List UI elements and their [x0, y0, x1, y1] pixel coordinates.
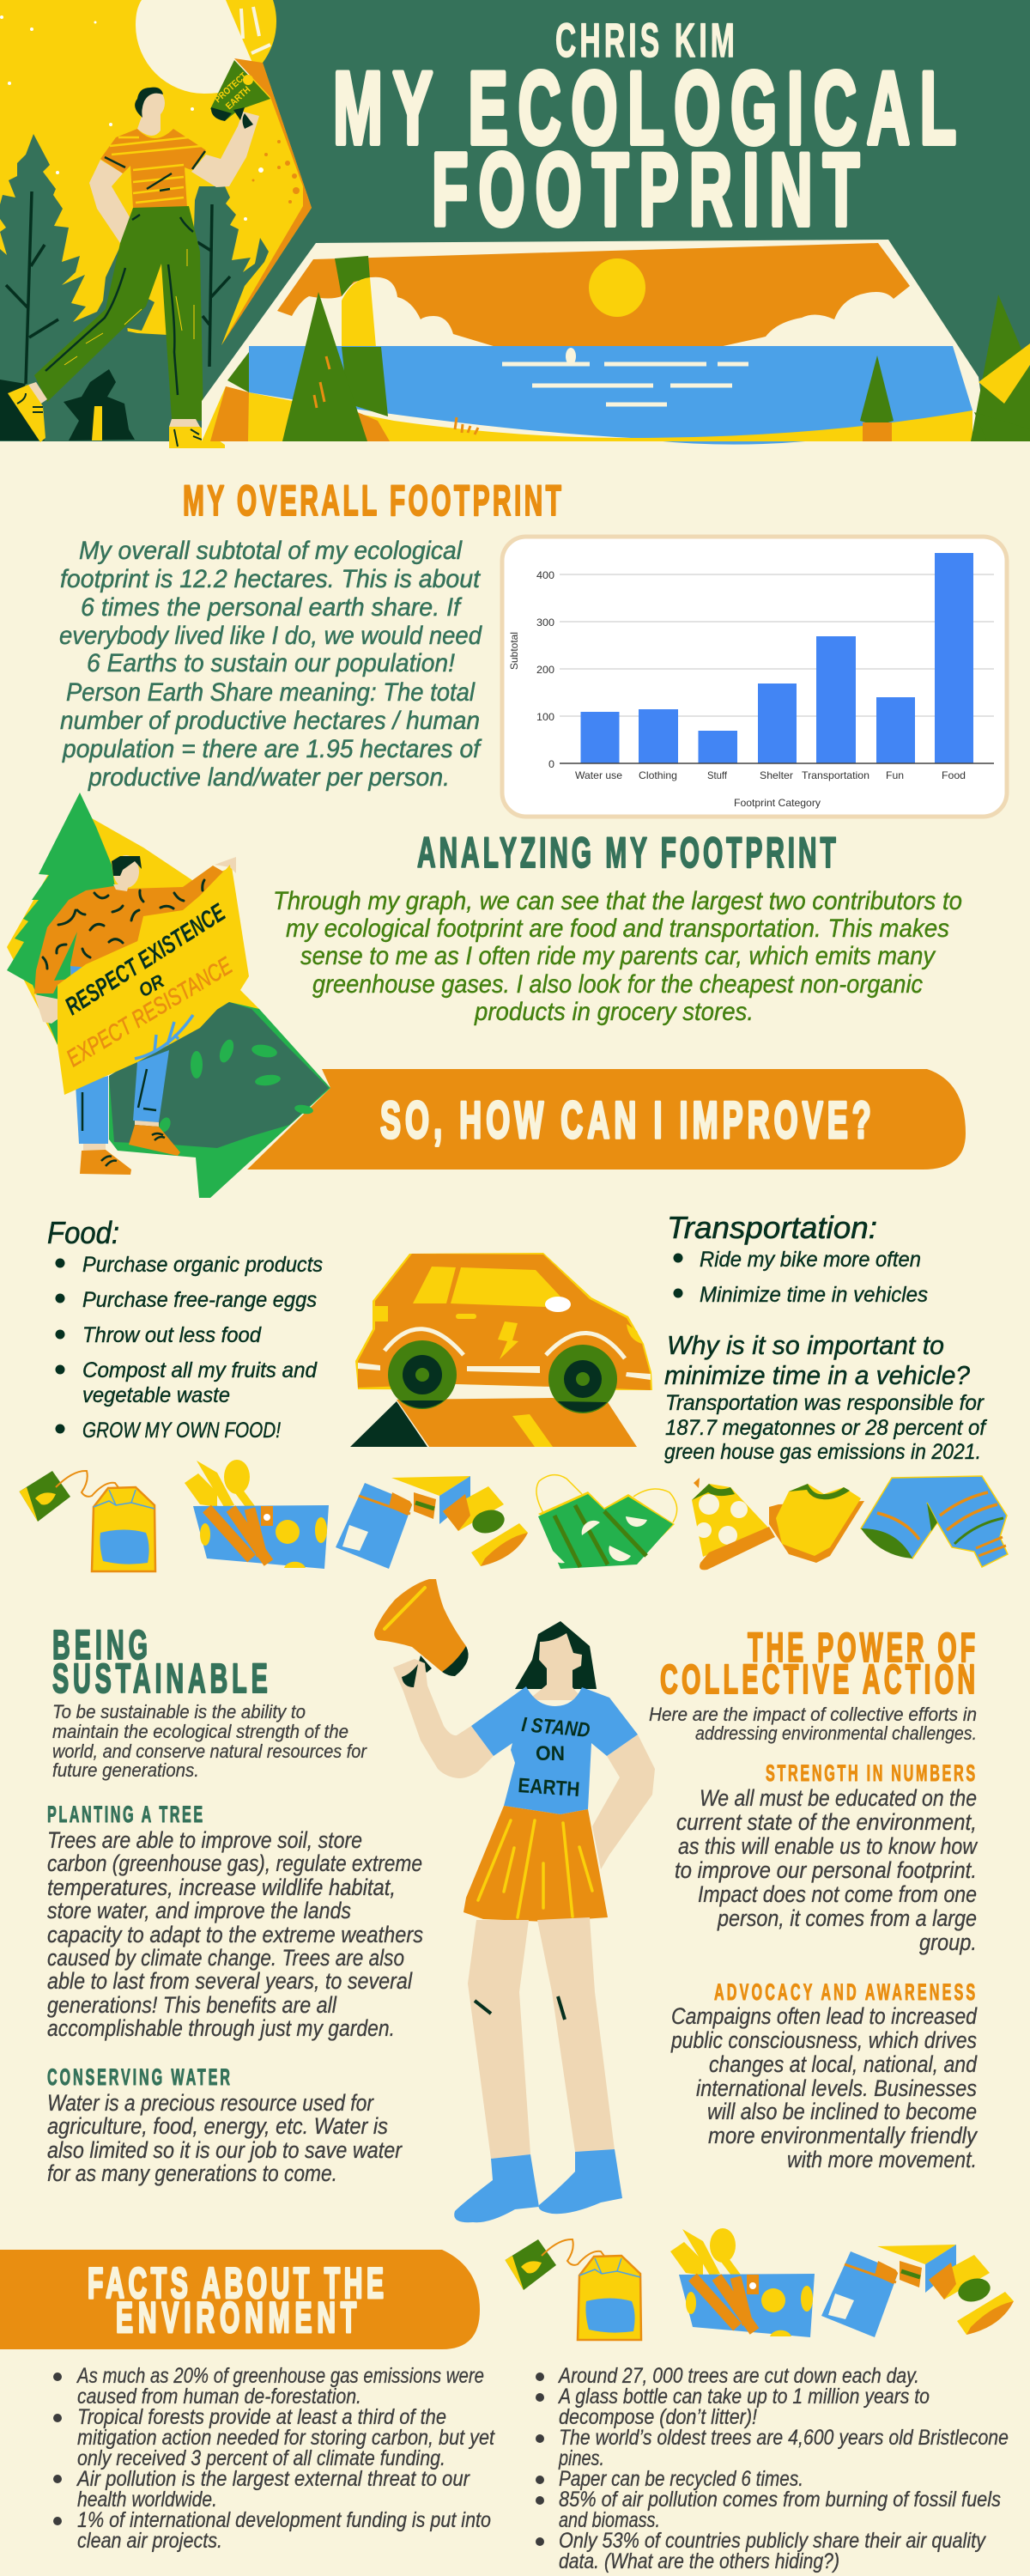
food list: GROW MY OWN FOOD!	[82, 1419, 281, 1443]
shirt text: ON	[536, 1742, 565, 1765]
transportation statistic: Transportation was responsible for	[665, 1391, 985, 1415]
illustration: man with megaphone	[8, 60, 270, 448]
icon: blue shorts	[861, 1476, 1008, 1567]
banner: facts about the environment: FACTS ABOUT THE	[88, 2259, 384, 2307]
text block: planting a tree: generations! This benefits are all	[47, 1992, 337, 2018]
list: environment facts left: 1% of international development funding is put into	[77, 2508, 491, 2532]
x axis labels: Transportation	[802, 769, 869, 781]
shoes	[80, 1150, 131, 1175]
x axis labels: Water use	[575, 769, 622, 781]
icon: tea bag	[19, 1471, 155, 1571]
text block: overall footprint: 6 times the personal earth share. If	[81, 593, 463, 622]
icon row: eco products repeated	[505, 2228, 1014, 2340]
text block: advocacy and awareness	[670, 1979, 978, 2172]
lake landscape scene	[202, 240, 1030, 445]
shirt text: I STAND	[520, 1713, 591, 1742]
text block: advocacy and awareness: will also be inclined to become	[707, 2099, 977, 2124]
banner: so, how can I improve	[247, 1069, 966, 1170]
text block: conserving water: for as many generations to come.	[47, 2160, 337, 2186]
text block: planting a tree: caused by climate change. Trees are also	[47, 1945, 404, 1971]
illustration: person with banner: OR	[135, 970, 168, 1001]
left pine tree	[0, 134, 129, 343]
list: environment facts right: Paper can be recycled 6 times.	[559, 2467, 803, 2491]
heading: the power of collective action	[660, 1625, 975, 1703]
header banner	[0, 0, 1030, 441]
main title line two: FOOTPRINT	[432, 131, 859, 247]
x axis labels: Stuff	[707, 769, 728, 781]
heading: my overall footprint: MY OVERALL FOOTPRINT	[183, 477, 561, 525]
text block: overall footprint: number of productive hectares / human	[60, 707, 480, 735]
text block: sustainability definition: maintain the ecological strength of the	[52, 1721, 348, 1742]
main title line one: MY ECOLOGICAL	[333, 50, 956, 166]
orange beam edge	[221, 58, 312, 345]
right pine tree	[193, 186, 269, 352]
megaphone	[374, 1579, 469, 1676]
heading: analyzing my footprint: ANALYZING MY FOOTPRINT	[417, 829, 836, 877]
text block: planting a tree: store water, and improve the lands	[47, 1898, 351, 1923]
raised arm and hand	[393, 1659, 494, 1778]
bars	[580, 553, 973, 763]
subheading: CONSERVING WATER	[47, 2064, 230, 2090]
text block: conserving water	[47, 2064, 403, 2186]
windows	[413, 1267, 456, 1303]
text block: collective intro: addressing environmental challenges.	[695, 1722, 977, 1744]
banner: so, how can I improve: SO, HOW CAN I IMPROVE?	[380, 1092, 871, 1149]
list: environment facts left: clean air projects.	[77, 2529, 222, 2553]
list: environment facts right: and biomass.	[559, 2508, 660, 2532]
y axis labels: 100	[536, 711, 554, 723]
text block: advocacy and awareness: international levels. Businesses	[696, 2075, 977, 2101]
text block: analyzing	[273, 887, 962, 1026]
hands	[34, 994, 64, 1024]
x axis labels	[575, 769, 966, 809]
why subheading	[664, 1330, 971, 1390]
why subheading: Why is it so important to	[667, 1330, 944, 1360]
banner: facts about the environment: ENVIRONMENT	[116, 2293, 356, 2342]
text block: conserving water: also limited so it is our job to save water	[47, 2137, 403, 2163]
dark tree silhouettes	[64, 369, 135, 440]
text block: analyzing: greenhouse gases. I also look for the cheapest non-organic	[312, 970, 923, 999]
list: environment facts right: decompose (don’t litter)!	[559, 2405, 757, 2429]
yellow backdrop	[7, 818, 259, 1082]
icon row: eco products	[19, 1460, 528, 1571]
food list: Throw out less food	[82, 1323, 262, 1347]
text block: planting a tree: temperatures, increase wildlife habitat,	[47, 1874, 396, 1900]
text block: advocacy and awareness: with more movement.	[787, 2147, 977, 2172]
transportation statistic: 187.7 megatonnes or 28 percent of	[665, 1416, 988, 1440]
text block: strength in numbers: to improve our personal footprint.	[675, 1857, 977, 1883]
text block: analyzing: my ecological footprint are food and transportation. This makes	[286, 914, 949, 943]
food list: Purchase free-range eggs	[82, 1288, 317, 1312]
text block: planting a tree	[47, 1801, 423, 2041]
list: environment facts left: Tropical forests provide at least a third of the	[77, 2405, 446, 2429]
list: environment facts right: A glass bottle can take up to 1 million years to	[557, 2385, 930, 2409]
panel: food	[47, 1215, 323, 1443]
author name: CHRIS KIM	[555, 13, 735, 67]
subheading: PLANTING A TREE	[47, 1801, 203, 1827]
striped shirt	[100, 129, 206, 208]
text block: planting a tree: capacity to adapt to the extreme weathers	[47, 1922, 423, 1947]
illustration: man with megaphone: PROTECT	[213, 70, 249, 105]
icon: green shopping bags	[536, 1475, 677, 1569]
food list: Purchase organic products	[82, 1253, 323, 1277]
list: environment facts left: mitigation action needed for storing carbon, but yet	[77, 2426, 495, 2450]
text block: planting a tree: Trees are able to improve soil, store	[47, 1827, 362, 1853]
shirt text: EARTH	[518, 1774, 580, 1801]
toast	[769, 1501, 864, 1563]
heading: the power of collective action: COLLECTIVE ACTION	[660, 1657, 975, 1703]
icon: cutlery cup	[185, 1460, 329, 1569]
illustration: woman with megaphone	[374, 1579, 655, 2222]
shirt text	[518, 1713, 591, 1801]
road	[397, 1398, 637, 1447]
list: environment facts left: caused from human de-forestation.	[77, 2385, 361, 2409]
list: environment facts left: only received 3 percent of all climate funding.	[77, 2446, 445, 2470]
text block: sustainability definition: future generations.	[52, 1759, 199, 1781]
x axis labels: Food	[942, 769, 966, 781]
text block: planting a tree: able to last from several years, to several	[47, 1968, 413, 1994]
face and neck	[528, 1633, 584, 1700]
list: environment facts right: data. (What are the others hiding?)	[559, 2549, 839, 2573]
ankle and shoes	[28, 382, 47, 405]
text block: strength in numbers: Impact does not come from one	[698, 1881, 977, 1907]
text block: strength in numbers: person, it comes from a large	[717, 1905, 977, 1931]
wheels	[388, 1340, 617, 1413]
food list: Compost all my fruits and	[82, 1358, 318, 1382]
text block: collective intro	[649, 1704, 977, 1744]
heading: the power of collective action: THE POWER OF	[748, 1625, 975, 1671]
green pine	[7, 793, 116, 1045]
text block: advocacy and awareness: public consciousness, which drives	[670, 2027, 977, 2053]
neck and head	[137, 112, 161, 136]
list: environment facts right: pines.	[558, 2446, 604, 2470]
far arm	[592, 1735, 655, 1869]
text block: sustainability definition	[52, 1701, 368, 1781]
x axis labels: Footprint Category	[734, 797, 821, 809]
panel: transportation	[664, 1210, 988, 1464]
shirt	[471, 1686, 638, 1814]
car body	[355, 1253, 652, 1390]
text block: overall footprint: 6 Earths to sustain our population!	[87, 649, 456, 677]
text block: overall footprint: productive land/water per person.	[88, 763, 450, 792]
icon: bitten food	[692, 1478, 864, 1570]
pizza slice	[692, 1484, 769, 1557]
megaphone	[210, 60, 270, 120]
boots	[454, 2154, 539, 2222]
heading: being sustainable: BEING	[52, 1623, 148, 1668]
heading: being sustainable	[52, 1623, 268, 1702]
legs	[468, 1920, 530, 2159]
left arm	[89, 160, 150, 259]
icon: paper bag and sandwich box	[336, 1476, 528, 1569]
text block: strength in numbers: as this will enable us to know how	[678, 1833, 978, 1859]
y axis labels: 200	[536, 664, 554, 676]
transportation statistic: green house gas emissions in 2021.	[664, 1440, 981, 1464]
subheading: STRENGTH IN NUMBERS	[766, 1760, 975, 1786]
transportation list: Ride my bike more often	[700, 1248, 921, 1272]
food heading: Food:	[47, 1215, 119, 1250]
head	[113, 855, 139, 888]
text block: strength in numbers: We all must be educated on the	[700, 1785, 977, 1811]
text block: overall footprint: everybody lived like I do, we would need	[59, 622, 482, 650]
y axis labels: 400	[536, 569, 554, 581]
list: environment facts right: Around 27, 000 trees are cut down each day.	[557, 2364, 919, 2388]
why subheading: minimize time in a vehicle?	[664, 1360, 971, 1390]
text block: strength in numbers: group.	[919, 1929, 977, 1955]
text block: strength in numbers	[675, 1760, 978, 1955]
text block: conserving water: agriculture, food, energy, etc. Water is	[47, 2113, 388, 2139]
y axis labels: 300	[536, 617, 554, 629]
text block: analyzing: Through my graph, we can see that the largest two contributors to	[273, 887, 962, 915]
subheading: ADVOCACY AND AWARENESS	[714, 1979, 975, 2005]
banner	[58, 865, 247, 1095]
text block: overall footprint: Person Earth Share meaning: The total	[66, 678, 476, 707]
illustration: person with banner: EXPECT RESISTANCE	[62, 952, 237, 1072]
text block: overall footprint: footprint is 12.2 hectares. This is about	[60, 565, 482, 593]
dark green blob	[109, 1002, 329, 1148]
bar chart panel	[502, 537, 1007, 817]
text block: collective intro: Here are the impact of collective efforts in	[649, 1704, 977, 1725]
hair	[515, 1621, 597, 1689]
text block: conserving water: Water is a precious resource used for	[47, 2090, 374, 2116]
illustration: car	[350, 1253, 652, 1447]
text block: overall footprint	[59, 537, 482, 792]
y axis labels	[536, 569, 554, 770]
skirt	[464, 1806, 608, 1922]
text block: sustainability definition: world, and conserve natural resources for	[52, 1741, 368, 1762]
text block: sustainability definition: To be sustainable is the ability to	[52, 1701, 306, 1722]
text block: planting a tree: accomplishable through just my garden.	[47, 2015, 395, 2041]
text block: overall footprint: population = there are 1.95 hectares of	[62, 735, 482, 763]
food list: vegetable waste	[82, 1383, 230, 1407]
text block: overall footprint: My overall subtotal of my ecological	[79, 537, 463, 565]
text block: planting a tree: carbon (greenhouse gas), regulate extreme	[47, 1850, 422, 1876]
title	[333, 13, 956, 247]
text block: advocacy and awareness: Campaigns often lead to increased	[671, 2003, 978, 2029]
x axis labels: Fun	[886, 769, 904, 781]
banner: facts about the environment	[0, 2250, 480, 2349]
list: environment facts left: health worldwide.	[77, 2488, 217, 2512]
text block: analyzing: products in grocery stores.	[474, 998, 754, 1026]
raised arm	[191, 112, 259, 187]
legs	[76, 1076, 108, 1144]
x axis labels: Clothing	[639, 769, 677, 781]
banner text: RESPECT EXISTENCE	[61, 898, 231, 1021]
leaves	[157, 1037, 314, 1134]
transportation statistic	[664, 1391, 988, 1464]
large green triangle	[109, 1002, 330, 1198]
list: environment facts left: As much as 20% of greenhouse gas emissions were	[76, 2364, 484, 2388]
y axis labels: 0	[548, 758, 554, 770]
sweater	[34, 866, 223, 993]
transportation heading: Transportation:	[667, 1210, 877, 1245]
food list	[55, 1253, 323, 1443]
list: environment facts left	[53, 2364, 495, 2553]
transportation list: Minimize time in vehicles	[700, 1283, 928, 1307]
text block: analyzing: sense to me as I often ride my parents car, which emits many	[300, 942, 936, 970]
list: environment facts right	[536, 2364, 1009, 2573]
text block: strength in numbers: current state of the environment,	[676, 1809, 977, 1835]
text block: advocacy and awareness: changes at local, national, and	[709, 2051, 978, 2077]
transportation list	[673, 1248, 928, 1307]
list: environment facts left: Air pollution is the largest external threat to our	[76, 2467, 470, 2491]
y axis title: Subtotal	[508, 632, 520, 670]
pants	[34, 206, 203, 421]
sun	[136, 0, 255, 94]
heading: being sustainable: SUSTAINABLE	[52, 1656, 268, 1702]
x axis labels: Shelter	[760, 769, 793, 781]
text block: advocacy and awareness: more environmentally friendly	[708, 2123, 978, 2148]
illustration: man with megaphone: EARTH	[224, 85, 252, 112]
illustration: person with banner	[7, 793, 330, 1198]
